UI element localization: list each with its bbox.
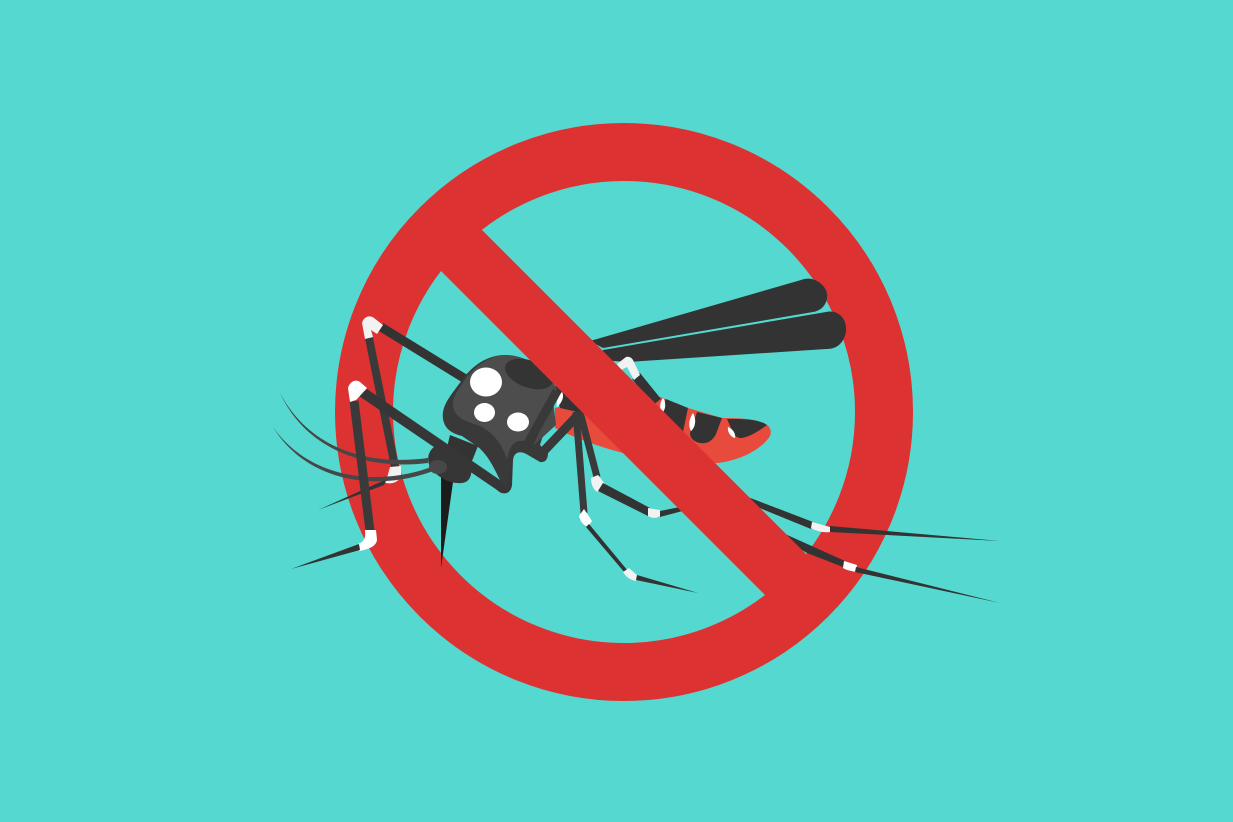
wings: [590, 279, 846, 362]
thorax: [443, 353, 579, 488]
thorax side midtone: [533, 400, 556, 446]
white spot large: [470, 368, 502, 396]
thorax struts: [527, 391, 579, 454]
mosquito: [273, 279, 1000, 603]
neck and head: [428, 435, 478, 483]
white spot right: [507, 412, 529, 432]
front leg, lower: [291, 381, 513, 569]
thorax dark patch: [501, 353, 557, 395]
leg C: [740, 494, 1000, 541]
leg B: [580, 412, 690, 518]
leg A: [576, 412, 698, 593]
white spot left: [474, 403, 495, 422]
hind legs: [576, 412, 1000, 603]
abdomen dark segments: [553, 386, 767, 443]
front leg, upper: [318, 316, 467, 510]
prohibition diagonal bar: [421, 210, 826, 616]
prohibition ring: [364, 152, 884, 672]
middle raised leg: [617, 357, 657, 402]
abdomen white slivers: [557, 392, 735, 438]
proboscis: [441, 477, 453, 568]
leg D: [785, 534, 1000, 603]
antennae: [273, 393, 436, 481]
abdomen: [553, 386, 771, 464]
